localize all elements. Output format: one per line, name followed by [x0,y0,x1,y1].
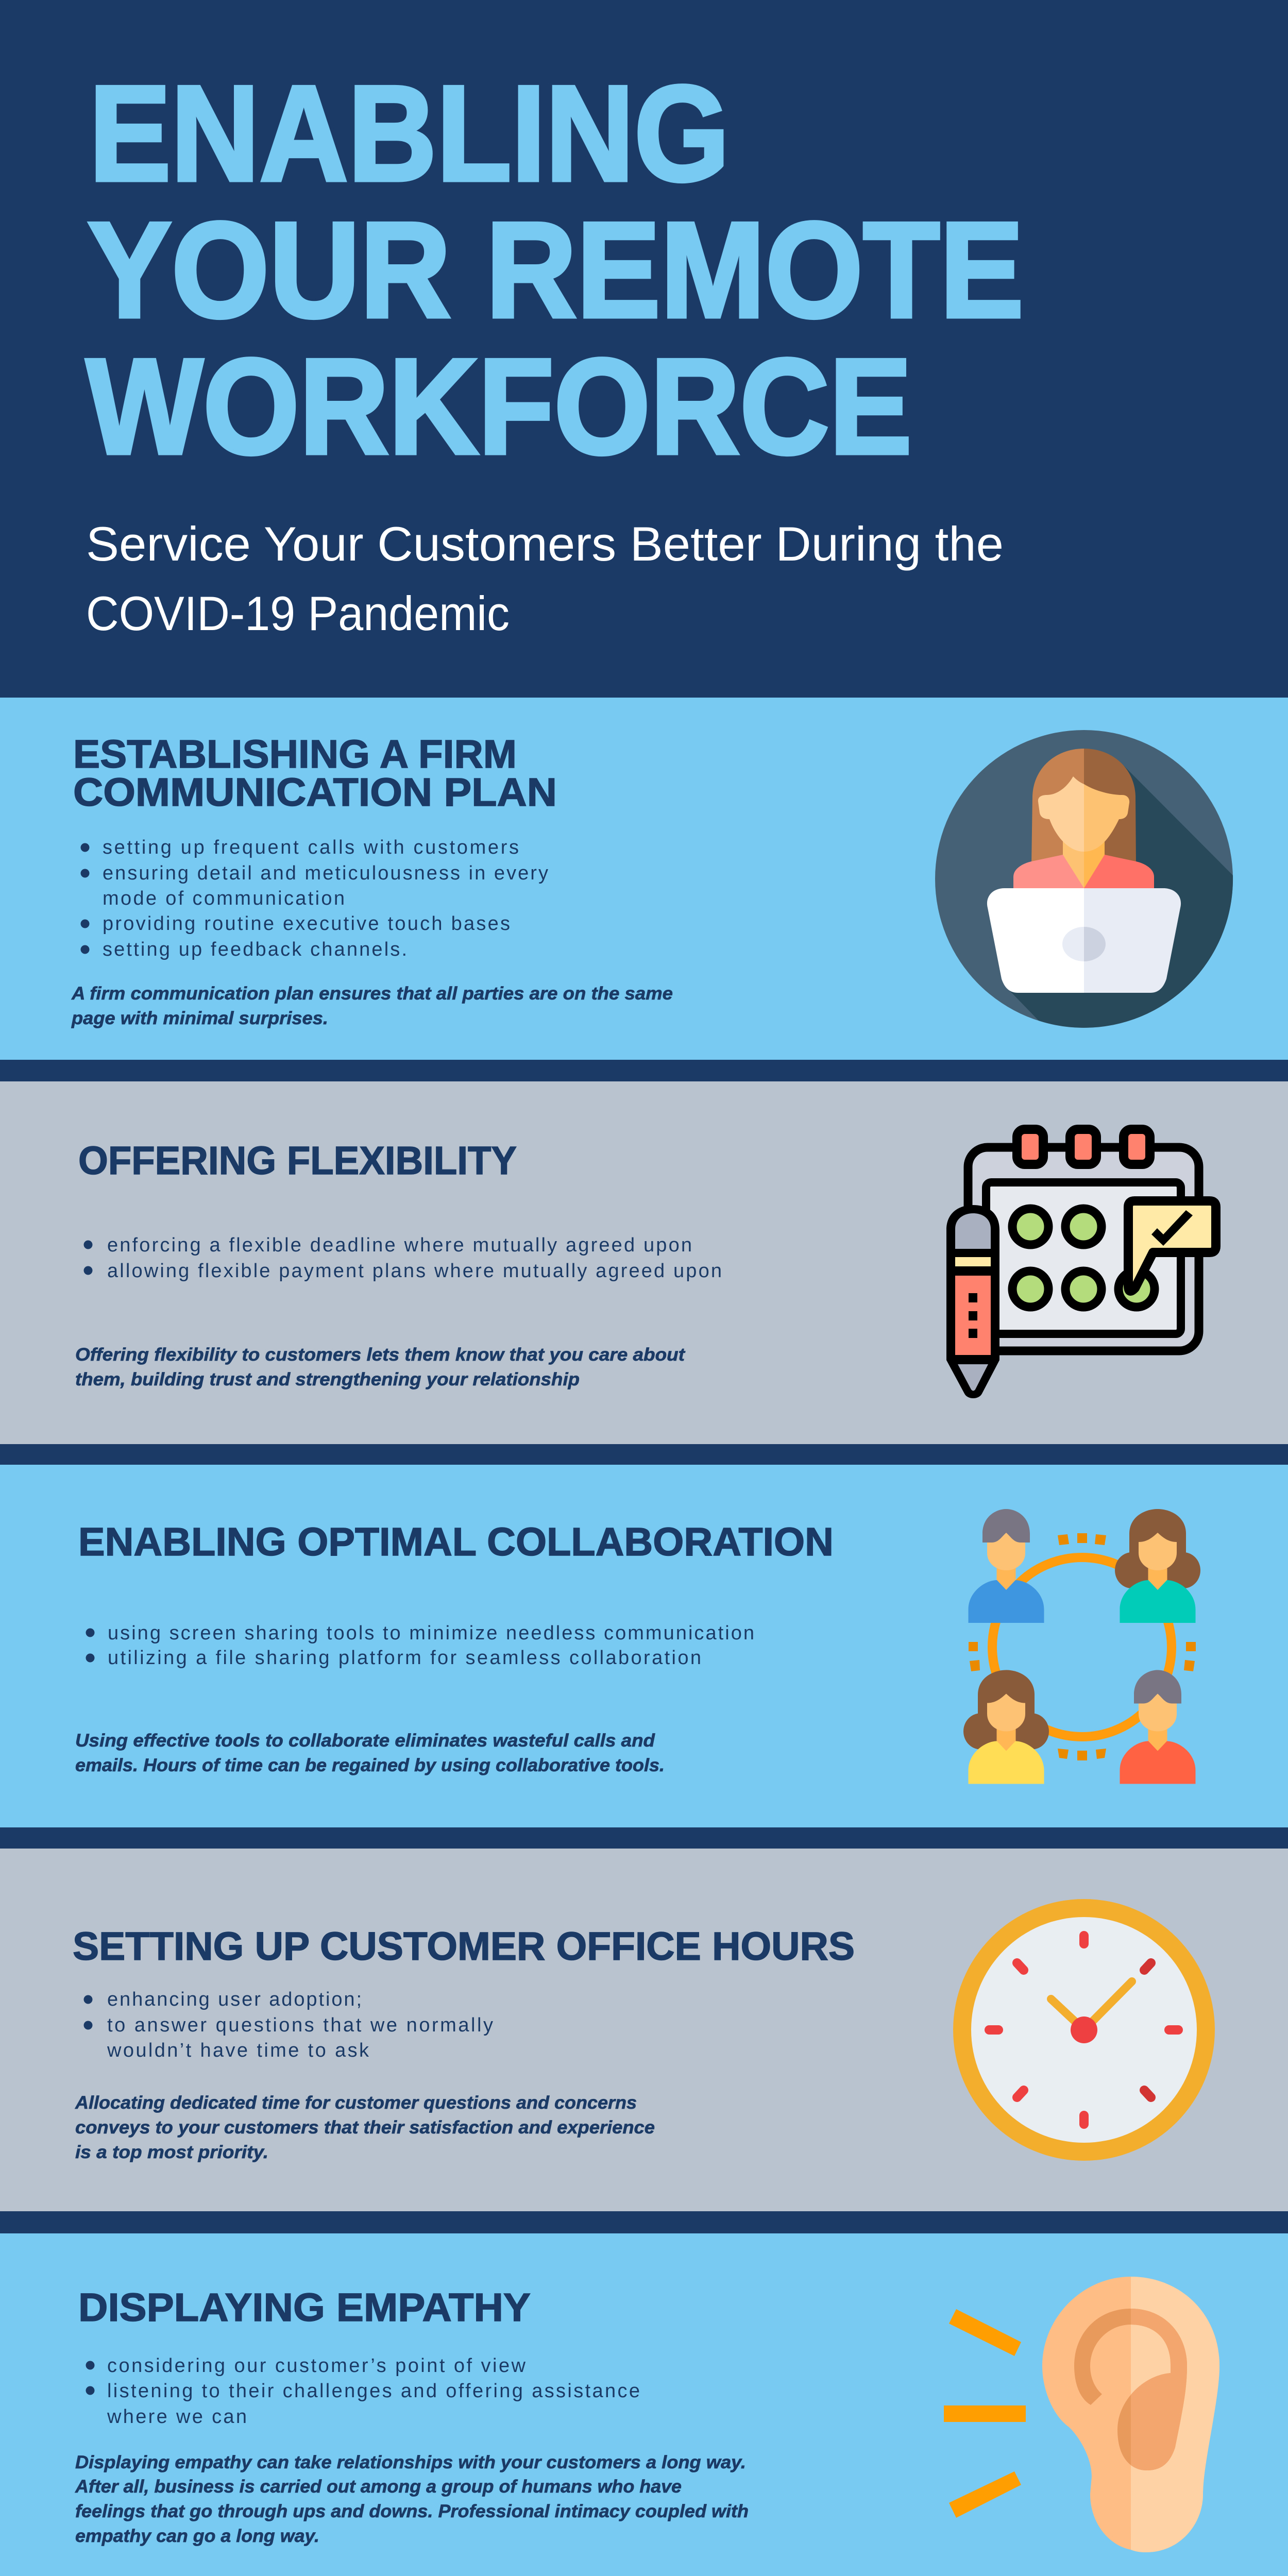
header panel [0,0,1288,698]
summary text: collaboration [75,1731,665,1775]
bullet list: empathy: where we can [107,2406,247,2428]
summary text: communication plan: page with minimal surprises. [71,1008,328,1028]
bullet list: communication plan: providing routine executive touch bases [103,913,510,935]
summary text: communication plan [71,984,673,1028]
bullet list: flexibility: enforcing a flexible deadline where mutually agreed upon [107,1234,692,1256]
summary text: empathy [75,2452,749,2546]
bullet list: empathy: considering our customer’s point of view [107,2355,526,2377]
bullet list: flexibility [83,1234,722,1282]
subtitle [86,517,1004,640]
bullet list: collaboration: using screen sharing tools to minimize needless communication [108,1622,754,1644]
heading: collaboration: ENABLING OPTIMAL COLLABORATION [78,1520,834,1564]
heading: empathy: DISPLAYING EMPATHY [78,2285,531,2330]
bullet list: office hours: wouldn’t have time to ask [107,2040,369,2061]
icon: ear with sound lines [944,2277,1219,2552]
heading: communication plan: ESTABLISHING A FIRM [73,732,517,776]
panel: collaboration [0,1465,1288,1827]
summary text: collaboration: emails. Hours of time can be regained by using collaborative tools. [75,1755,665,1775]
bullet list: collaboration: utilizing a file sharing platform for seamless collaboration [108,1647,701,1669]
bullet list: empathy: listening to their challenges and offering assistance [107,2380,640,2402]
summary text: flexibility [75,1345,685,1389]
title: WORKFORCE [86,330,912,482]
bullet list: office hours: enhancing user adoption; [107,1989,362,2010]
bullet list: communication plan: setting up frequent calls with customers [103,837,519,858]
bullet list: communication plan [80,837,548,960]
panel: office hours [0,1849,1288,2211]
bullet list: empathy [86,2355,640,2428]
bullet list: office hours: to answer questions that we normally [107,2014,493,2036]
person: man in red [1120,1670,1195,1784]
heading: communication plan [73,732,557,815]
panel: flexibility [0,1081,1288,1444]
icon: team collaboration ring [963,1509,1200,1784]
person: woman in yellow [963,1670,1049,1784]
title [86,57,1024,482]
summary text: flexibility: them, building trust and strengthening your relationship [75,1369,580,1389]
panel: empathy [0,2233,1288,2576]
summary text: flexibility: Offering flexibility to customers lets them know that you care about [75,1345,685,1365]
person: woman in teal [1115,1509,1200,1623]
summary text: office hours [75,2093,655,2162]
heading: flexibility: OFFERING FLEXIBILITY [78,1139,517,1183]
panel: communication plan [0,698,1288,1060]
icon: clock [953,1899,1215,2161]
summary text: office hours: Allocating dedicated time for customer questions and concerns [75,2093,637,2113]
summary text: empathy: feelings that go through ups and downs. Professional intimacy coupled with [75,2501,749,2521]
summary text: office hours: conveys to your customers that their satisfaction and experience [75,2117,655,2138]
title: YOUR REMOTE [88,194,1024,346]
bullet list: communication plan: ensuring detail and meticulousness in every [103,862,548,884]
heading: office hours: SETTING UP CUSTOMER OFFICE HOURS [73,1924,855,1969]
icon: woman at laptop [935,730,1233,1028]
icon: calendar with pen [946,1129,1216,1398]
bullet list: collaboration [86,1622,754,1669]
subtitle: COVID-19 Pandemic [86,586,510,640]
heading: communication plan: COMMUNICATION PLAN [73,770,557,815]
subtitle: Service Your Customers Better During the [86,517,1004,571]
bullet list: communication plan: setting up feedback channels. [103,939,407,960]
summary text: office hours: is a top most priority. [75,2142,268,2162]
bullet list: communication plan: mode of communication [103,888,345,909]
bullet list: flexibility: allowing flexible payment plans where mutually agreed upon [107,1260,722,1282]
summary text: empathy: empathy can go a long way. [75,2526,319,2546]
title: ENABLING [89,57,730,209]
bullet list: office hours [83,1989,493,2061]
summary text: empathy: After all, business is carried out among a group of humans who have [75,2477,682,2497]
person: man in blue [969,1509,1044,1623]
summary text: communication plan: A firm communication plan ensures that all parties are on the same [71,984,673,1004]
summary text: empathy: Displaying empathy can take relationships with your customers a long way. [75,2452,746,2472]
summary text: collaboration: Using effective tools to collaborate eliminates wasteful calls and [75,1731,655,1751]
